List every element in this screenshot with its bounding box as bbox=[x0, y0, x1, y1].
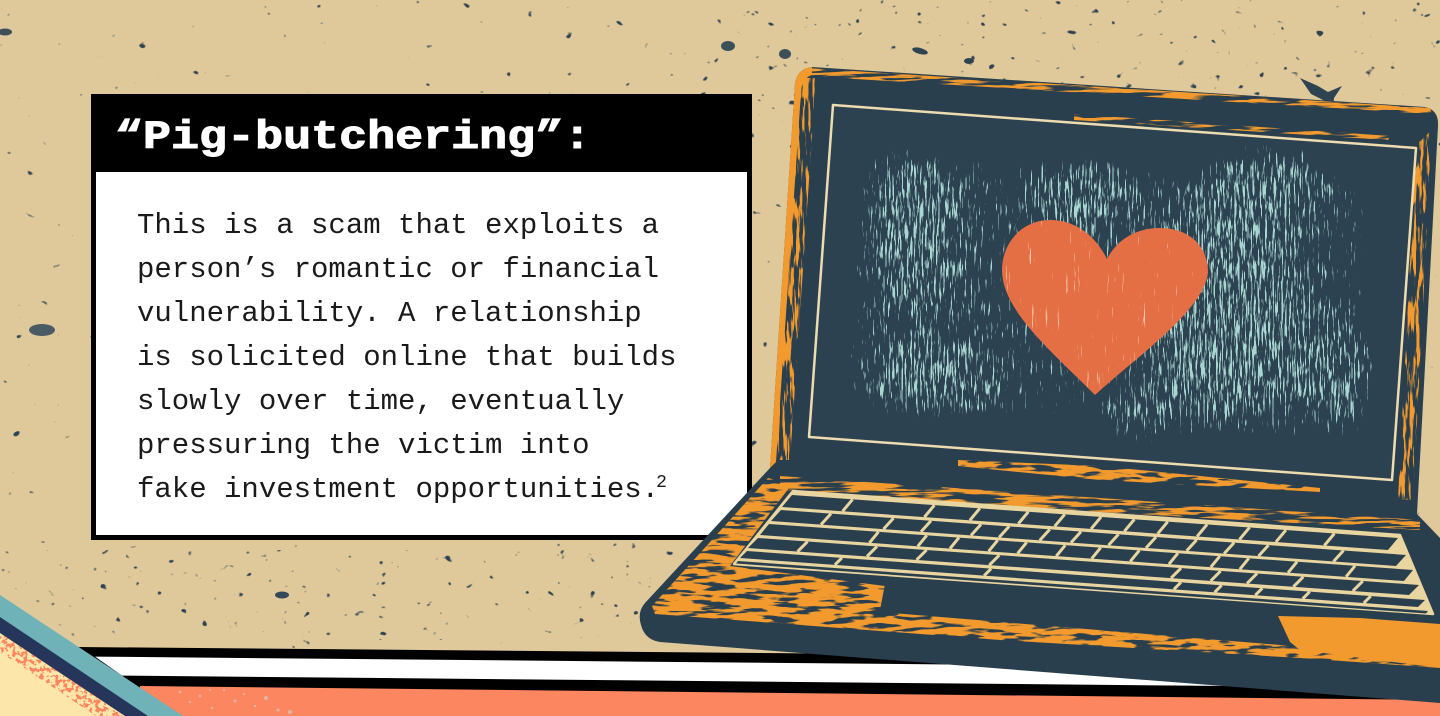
deck orange wear bbox=[652, 478, 1440, 668]
definition text: person’s romantic or financial bbox=[137, 253, 659, 286]
bezel bottom wear bbox=[958, 460, 1320, 492]
trackpad bbox=[880, 584, 1283, 641]
key row 1 bbox=[782, 495, 1398, 550]
corner triangle: navy band bbox=[0, 617, 148, 716]
keyboard bbox=[734, 491, 1433, 614]
definition text: vulnerability. A relationship bbox=[137, 297, 642, 330]
key row 2 bbox=[771, 510, 1406, 566]
key row 5 bbox=[740, 551, 1425, 607]
orange speckle bbox=[179, 689, 292, 714]
lid left edge orange bbox=[770, 67, 812, 468]
lid top edge wear bbox=[806, 68, 1432, 140]
stripe: white band bbox=[95, 657, 1440, 688]
screen scratches bbox=[830, 135, 1395, 458]
lid side edge wear bbox=[774, 78, 1432, 500]
key row 3 bbox=[760, 524, 1413, 581]
stripe: orange field bbox=[140, 686, 1440, 716]
stripe: black upper band bbox=[78, 647, 1440, 716]
definition text: is solicited online that builds bbox=[137, 341, 676, 374]
definition text bbox=[137, 209, 676, 506]
definition panel bbox=[91, 94, 752, 540]
panel body bbox=[96, 172, 747, 535]
key row 4 bbox=[748, 538, 1419, 595]
corner triangle: cream field bbox=[0, 633, 125, 716]
definition text: slowly over time, eventually bbox=[137, 385, 624, 418]
right palm rest orange bbox=[1278, 616, 1440, 668]
icon: heart bbox=[1002, 220, 1208, 395]
definition text: This is a scam that exploits a bbox=[137, 209, 659, 242]
corner triangle: orange flecks bbox=[0, 633, 125, 716]
screen frame bbox=[809, 105, 1416, 480]
laptop body silhouette bbox=[640, 67, 1440, 703]
definition text: fake investment opportunities.2 bbox=[137, 473, 667, 506]
panel heading: “Pig-butchering”: bbox=[115, 116, 591, 161]
hinge wear above keyboard bbox=[780, 476, 1420, 530]
keyboard frame bbox=[734, 491, 1433, 614]
definition text: pressuring the victim into bbox=[137, 429, 589, 462]
keyboard bottom strip bbox=[736, 561, 1428, 614]
corner triangle: teal band bbox=[0, 595, 183, 716]
